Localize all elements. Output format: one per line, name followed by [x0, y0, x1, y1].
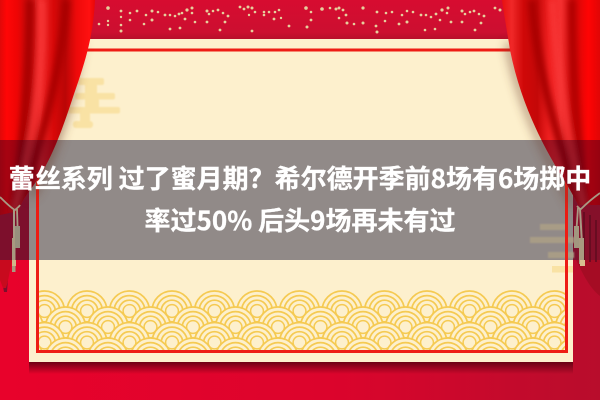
right curtain — [500, 0, 600, 296]
wave scale pattern — [39, 290, 565, 350]
right tie and tassel — [574, 193, 600, 266]
left curtain — [0, 0, 100, 292]
left tie and tassel — [0, 197, 20, 272]
cloud motif left — [68, 78, 120, 128]
red inner frame — [38, 50, 566, 352]
cream panel — [29, 39, 573, 362]
gold confetti dots — [98, 6, 501, 34]
grey banner over panel — [0, 140, 600, 260]
headline text: 蕾丝系列 过了蜜月期？希尔德开季前8场有6场掷中 — [9, 159, 591, 196]
headline text: 率过50% 后头9场再未有过 — [145, 201, 455, 238]
curtain cast shadows — [28, 40, 574, 215]
cloud motif right — [552, 266, 573, 272]
headline text — [9, 159, 591, 238]
top red band — [80, 0, 520, 40]
cream panel shadow — [29, 362, 573, 374]
